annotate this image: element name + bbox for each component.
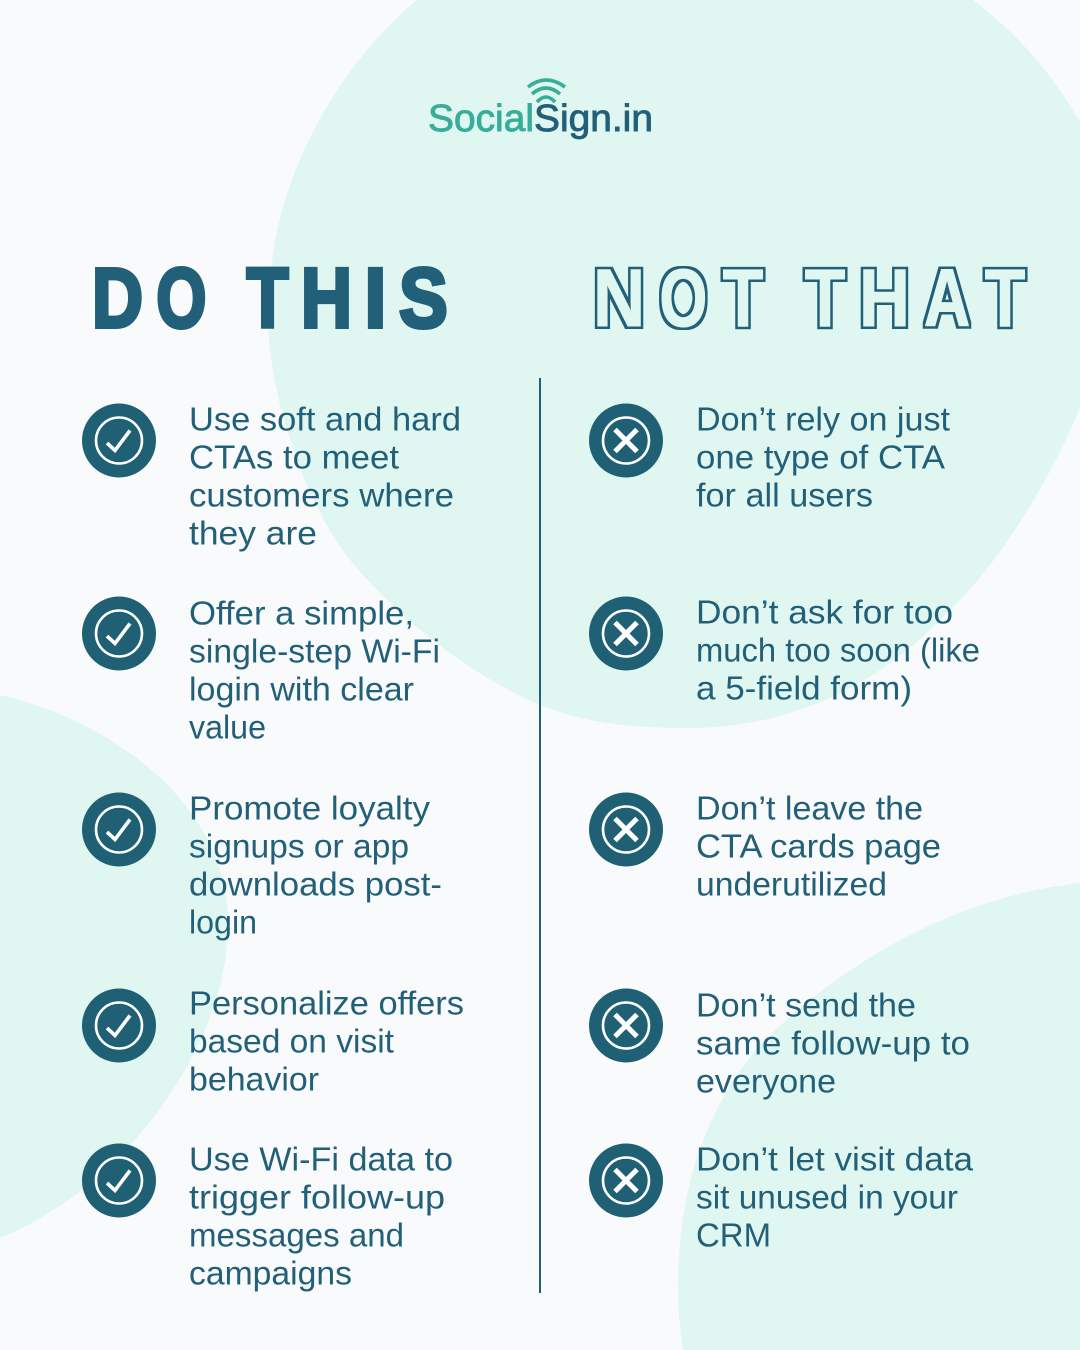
item 3 not: Don’t leave the — [696, 790, 923, 826]
background shape: left — [0, 695, 228, 1238]
heading: DO THIS: I — [364, 252, 386, 346]
background shape: top right — [268, 0, 1080, 728]
item 1 not: one type of CTA — [696, 438, 945, 476]
item 2 not: much too soon (like — [696, 632, 980, 668]
logo: SocialSign.in — [428, 80, 653, 140]
column: not that — [589, 400, 980, 1254]
heading: DO THIS: S — [399, 251, 448, 345]
heading: DO THIS — [92, 251, 448, 346]
item 2 do: login with clear — [189, 670, 414, 708]
item 5 not: sit unused in your — [696, 1178, 958, 1216]
item 1 not: Don’t rely on just — [696, 400, 950, 438]
item 3 do: login — [189, 904, 257, 940]
icon: wifi arcs — [528, 80, 565, 102]
heading: DO THIS: H — [301, 252, 352, 345]
item 5 not — [589, 1140, 974, 1254]
heading: DO THIS: O — [156, 251, 206, 345]
item 3 do: downloads post- — [189, 866, 442, 902]
heading: NOT THAT: T — [723, 252, 763, 344]
item 3 do — [82, 790, 442, 940]
background shape: bottom right — [678, 883, 1080, 1350]
item 4 do: Personalize offers — [189, 984, 464, 1022]
heading: NOT THAT: N — [593, 253, 645, 344]
heading: NOT THAT: T — [805, 252, 845, 344]
item 4 not: same follow-up to — [696, 1024, 970, 1062]
heading: NOT THAT: A — [924, 252, 970, 344]
heading: NOT THAT: H — [859, 253, 910, 344]
item 4 not: everyone — [696, 1062, 836, 1100]
item 1 not — [589, 400, 950, 514]
item 5 do: trigger follow-up — [189, 1178, 445, 1216]
item 4 do: based on visit — [189, 1022, 394, 1060]
heading: DO THIS: D — [92, 252, 143, 345]
item 2 not — [589, 594, 980, 706]
item 2 not: a 5-field form) — [696, 670, 912, 706]
item 4 do: behavior — [189, 1060, 319, 1098]
item 4 do — [82, 984, 464, 1098]
item 1 do: customers where — [189, 476, 454, 514]
item 3 do: signups or app — [189, 828, 409, 864]
item 5 do — [82, 1140, 453, 1292]
heading: NOT THAT: O — [660, 254, 707, 344]
center divider — [539, 378, 541, 1293]
item 2 do: value — [189, 708, 266, 746]
item 2 do: single-step Wi-Fi — [189, 632, 440, 670]
logo wordmark: SocialSign.in — [428, 98, 653, 140]
item 3 not: underutilized — [696, 866, 887, 902]
column: do this — [82, 400, 464, 1292]
item 4 not — [589, 986, 970, 1100]
item 5 do: messages and — [189, 1216, 404, 1254]
item 2 not: Don’t ask for too — [696, 594, 953, 630]
item 5 not: Don’t let visit data — [696, 1140, 974, 1178]
heading: DO THIS: T — [247, 252, 288, 346]
item 3 not — [589, 790, 941, 902]
item 3 not: CTA cards page — [696, 828, 941, 864]
item 1 do: CTAs to meet — [189, 438, 399, 476]
item 1 do: Use soft and hard — [189, 400, 461, 438]
item 4 not: Don’t send the — [696, 986, 916, 1024]
item 1 do — [82, 400, 461, 552]
heading: NOT THAT — [593, 252, 1025, 344]
item 5 not: CRM — [696, 1216, 771, 1254]
item 2 do — [82, 594, 440, 746]
item 1 do: they are — [189, 514, 317, 552]
item 1 not: for all users — [696, 476, 873, 514]
item 3 do: Promote loyalty — [189, 790, 431, 826]
item 5 do: Use Wi-Fi data to — [189, 1140, 453, 1178]
item 5 do: campaigns — [189, 1254, 352, 1292]
item 2 do: Offer a simple, — [189, 594, 414, 632]
heading: NOT THAT: T — [985, 252, 1025, 344]
